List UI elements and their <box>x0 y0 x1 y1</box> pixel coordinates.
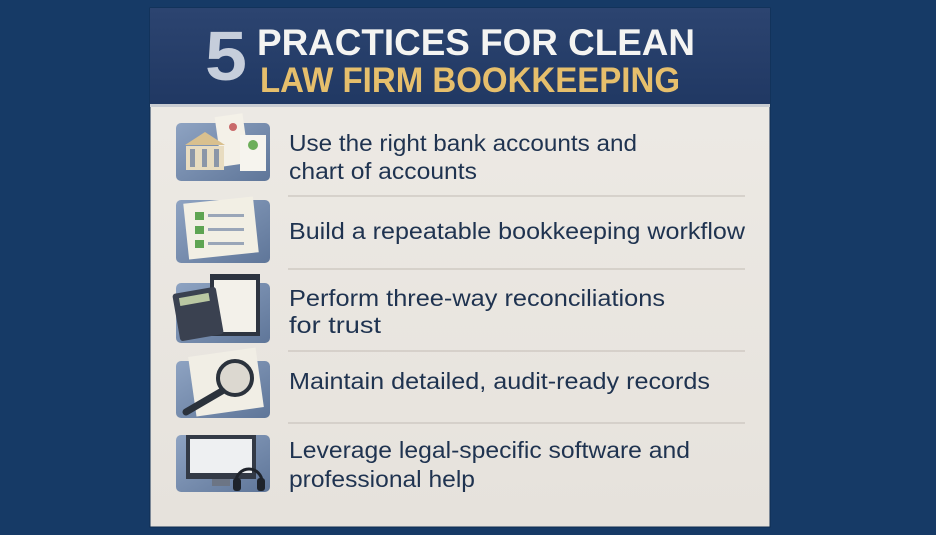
text: practice 5: professional help <box>289 466 475 492</box>
text: practice 4: Maintain detailed, audit-ready records <box>289 368 710 394</box>
icon: monitor and headset <box>176 435 270 492</box>
text: practice 5 <box>289 437 690 492</box>
header band <box>150 8 770 107</box>
icon: checklist <box>176 196 270 263</box>
text: practice 3: Perform three-way reconciliations <box>289 285 665 311</box>
icon: magnifier over records <box>176 348 270 418</box>
title line 2: LAW FIRM BOOKKEEPING <box>260 61 680 100</box>
panel: card <box>150 8 770 527</box>
text: practice 1: chart of accounts <box>289 158 477 184</box>
title line 1: PRACTICES FOR CLEAN <box>257 22 695 63</box>
text: practice 1: Use the right bank accounts and <box>289 130 637 156</box>
icon: bank and documents <box>176 113 270 181</box>
icon: calculator and clipboard <box>172 274 270 343</box>
text: practice 1 <box>289 130 637 184</box>
text: practice 2: Build a repeatable bookkeeping workflow <box>289 218 745 244</box>
text: practice 5: Leverage legal-specific software and <box>289 437 690 463</box>
text: practice 3: for trust <box>289 312 382 338</box>
title number: 5 <box>205 17 247 95</box>
text: practice 3 <box>289 285 665 338</box>
